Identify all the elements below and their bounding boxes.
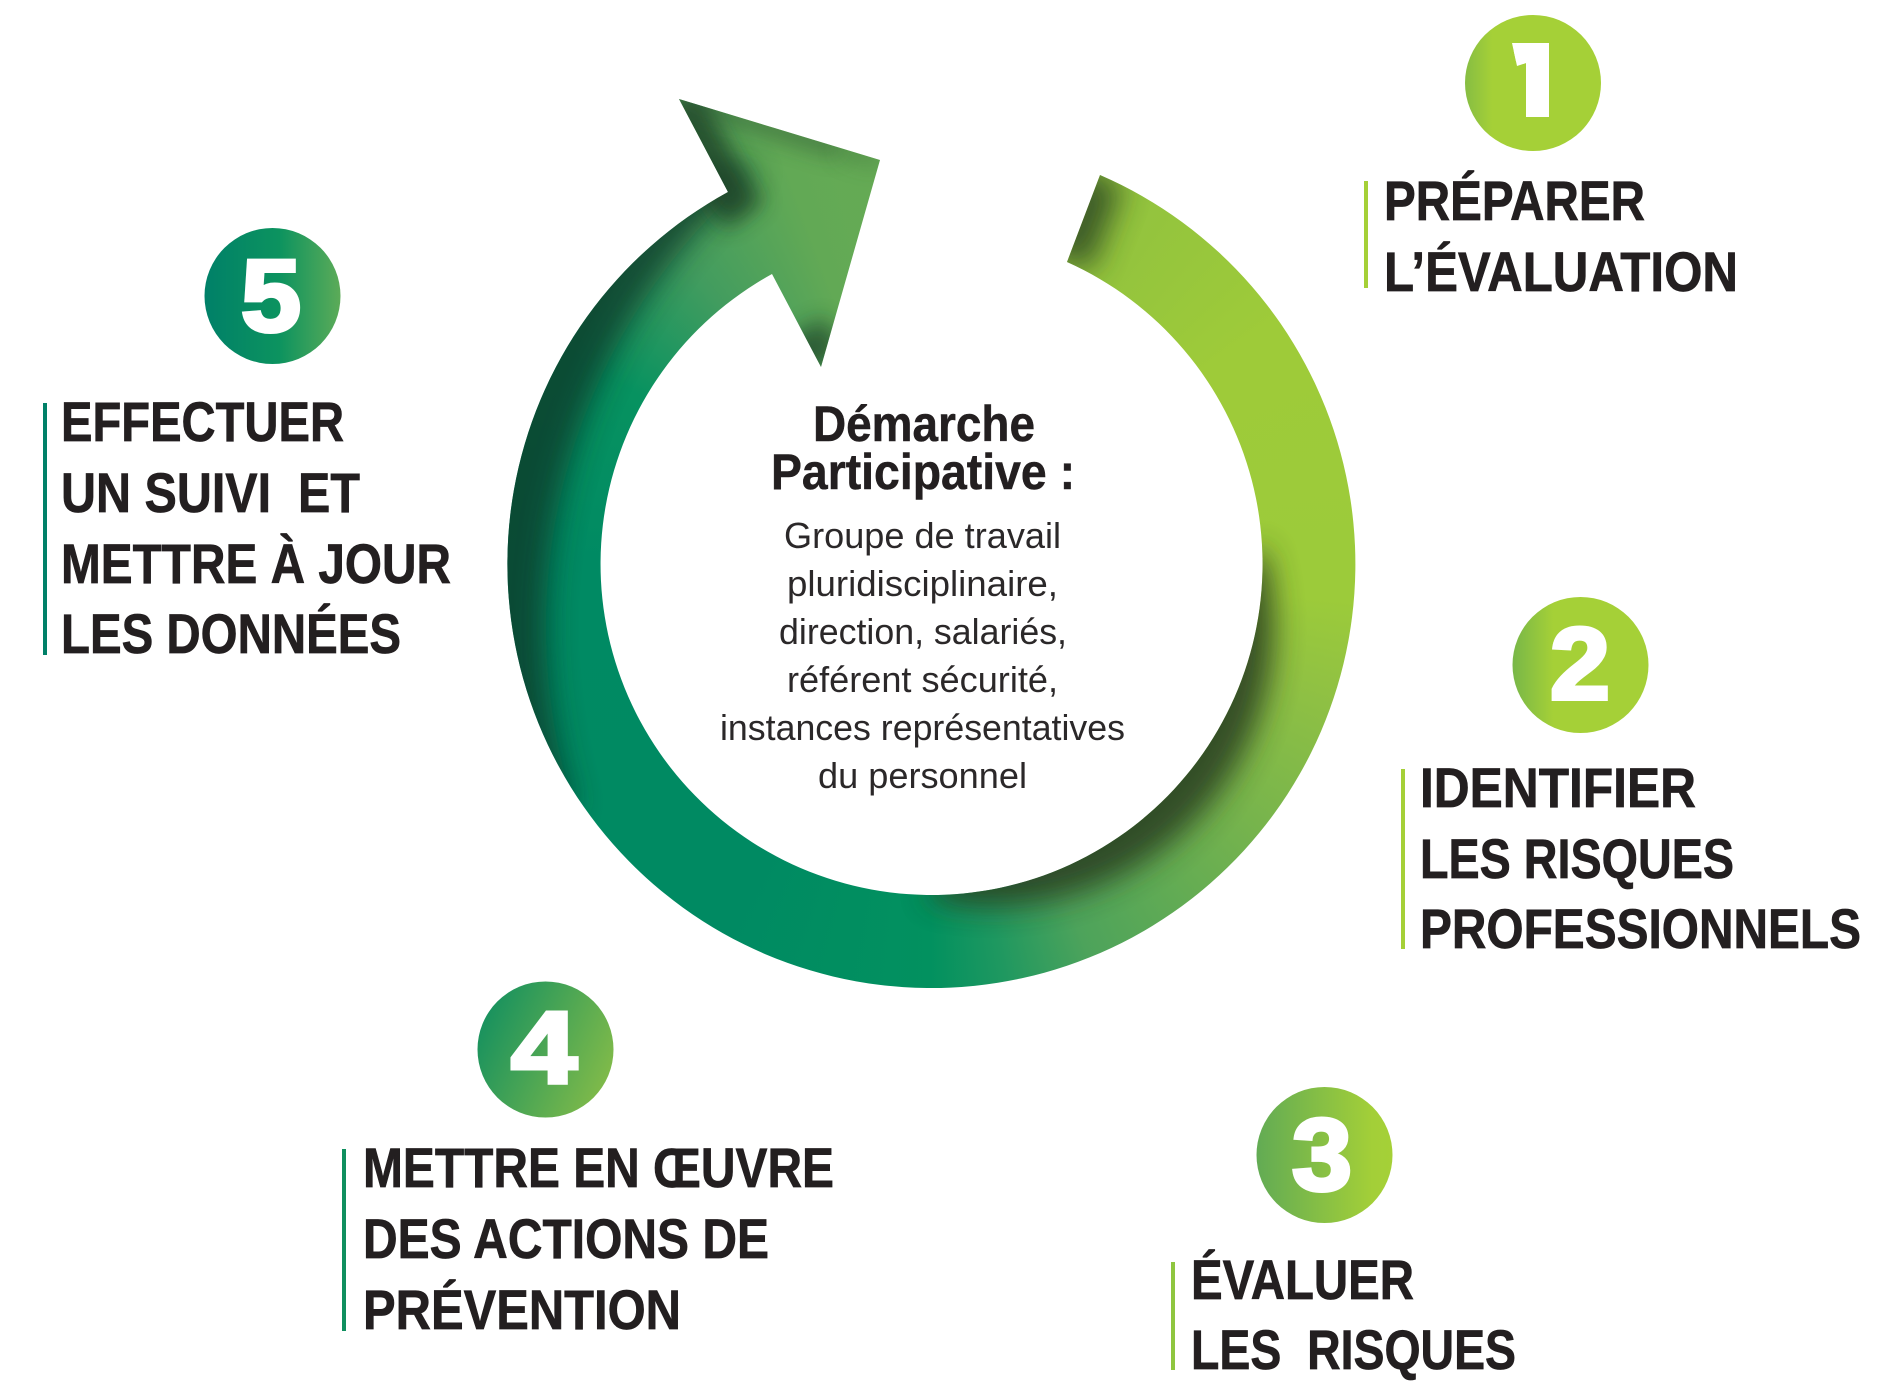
step 3 label: LES RISQUES bbox=[1191, 1318, 1516, 1381]
step 4 bbox=[342, 982, 834, 1341]
step 1 label bbox=[1384, 169, 1738, 303]
step 4 label: METTRE EN ŒUVRE bbox=[363, 1136, 834, 1199]
badge 3 bbox=[1256, 1087, 1392, 1223]
badge 5 bbox=[204, 228, 340, 364]
step 2 label: LES RISQUES bbox=[1420, 827, 1734, 890]
badge 2: 2 bbox=[1550, 607, 1610, 721]
step 4 label: DES ACTIONS DE bbox=[363, 1207, 769, 1270]
badge 1: 1 bbox=[1492, 24, 1567, 138]
step 1 label: PRÉPARER bbox=[1384, 169, 1645, 232]
centre description: référent sécurité, bbox=[787, 659, 1058, 700]
step 5 label: EFFECTUER bbox=[61, 390, 344, 453]
centre description: du personnel bbox=[818, 755, 1027, 796]
step 1 bbox=[1364, 15, 1738, 303]
step 4 label bbox=[363, 1136, 834, 1341]
step 3 label bbox=[1191, 1248, 1516, 1381]
step 5 bbox=[43, 228, 451, 665]
step 5 label bbox=[61, 390, 451, 665]
badge 3: 3 bbox=[1292, 1098, 1352, 1212]
step 1 label: L’ÉVALUATION bbox=[1384, 240, 1738, 303]
step 4 label: PRÉVENTION bbox=[363, 1278, 681, 1341]
badge 2 bbox=[1512, 597, 1648, 733]
centre heading: Démarche bbox=[813, 396, 1035, 452]
accent bar 2 bbox=[1401, 769, 1405, 949]
centre description: pluridisciplinaire, bbox=[787, 563, 1058, 604]
badge 5: 5 bbox=[241, 239, 301, 353]
badge 4 bbox=[478, 982, 614, 1118]
accent bar 4 bbox=[342, 1149, 346, 1331]
centre description bbox=[720, 515, 1125, 796]
centre heading: Participative : bbox=[771, 444, 1075, 500]
centre description: Groupe de travail bbox=[784, 515, 1061, 556]
centre heading bbox=[771, 396, 1075, 500]
centre description: instances représentatives bbox=[720, 707, 1125, 748]
step 2 bbox=[1401, 597, 1861, 960]
circular arrow with shaded gradient bbox=[507, 99, 1356, 988]
centre text block bbox=[720, 396, 1125, 796]
accent bar 3 bbox=[1171, 1262, 1175, 1370]
step 2 label: IDENTIFIER bbox=[1420, 756, 1696, 819]
step 5 label: METTRE À JOUR bbox=[61, 532, 451, 595]
step 3 label: ÉVALUER bbox=[1191, 1248, 1414, 1311]
step 5 label: LES DONNÉES bbox=[61, 602, 401, 665]
step 5 label: UN SUIVI ET bbox=[61, 461, 360, 524]
accent bar 1 bbox=[1364, 181, 1368, 288]
accent bar 5 bbox=[43, 403, 47, 655]
step 2 label bbox=[1420, 756, 1861, 960]
badge 1 bbox=[1465, 15, 1601, 151]
centre description: direction, salariés, bbox=[779, 611, 1067, 652]
badge 4: 4 bbox=[511, 991, 577, 1105]
step 3 bbox=[1171, 1087, 1516, 1381]
